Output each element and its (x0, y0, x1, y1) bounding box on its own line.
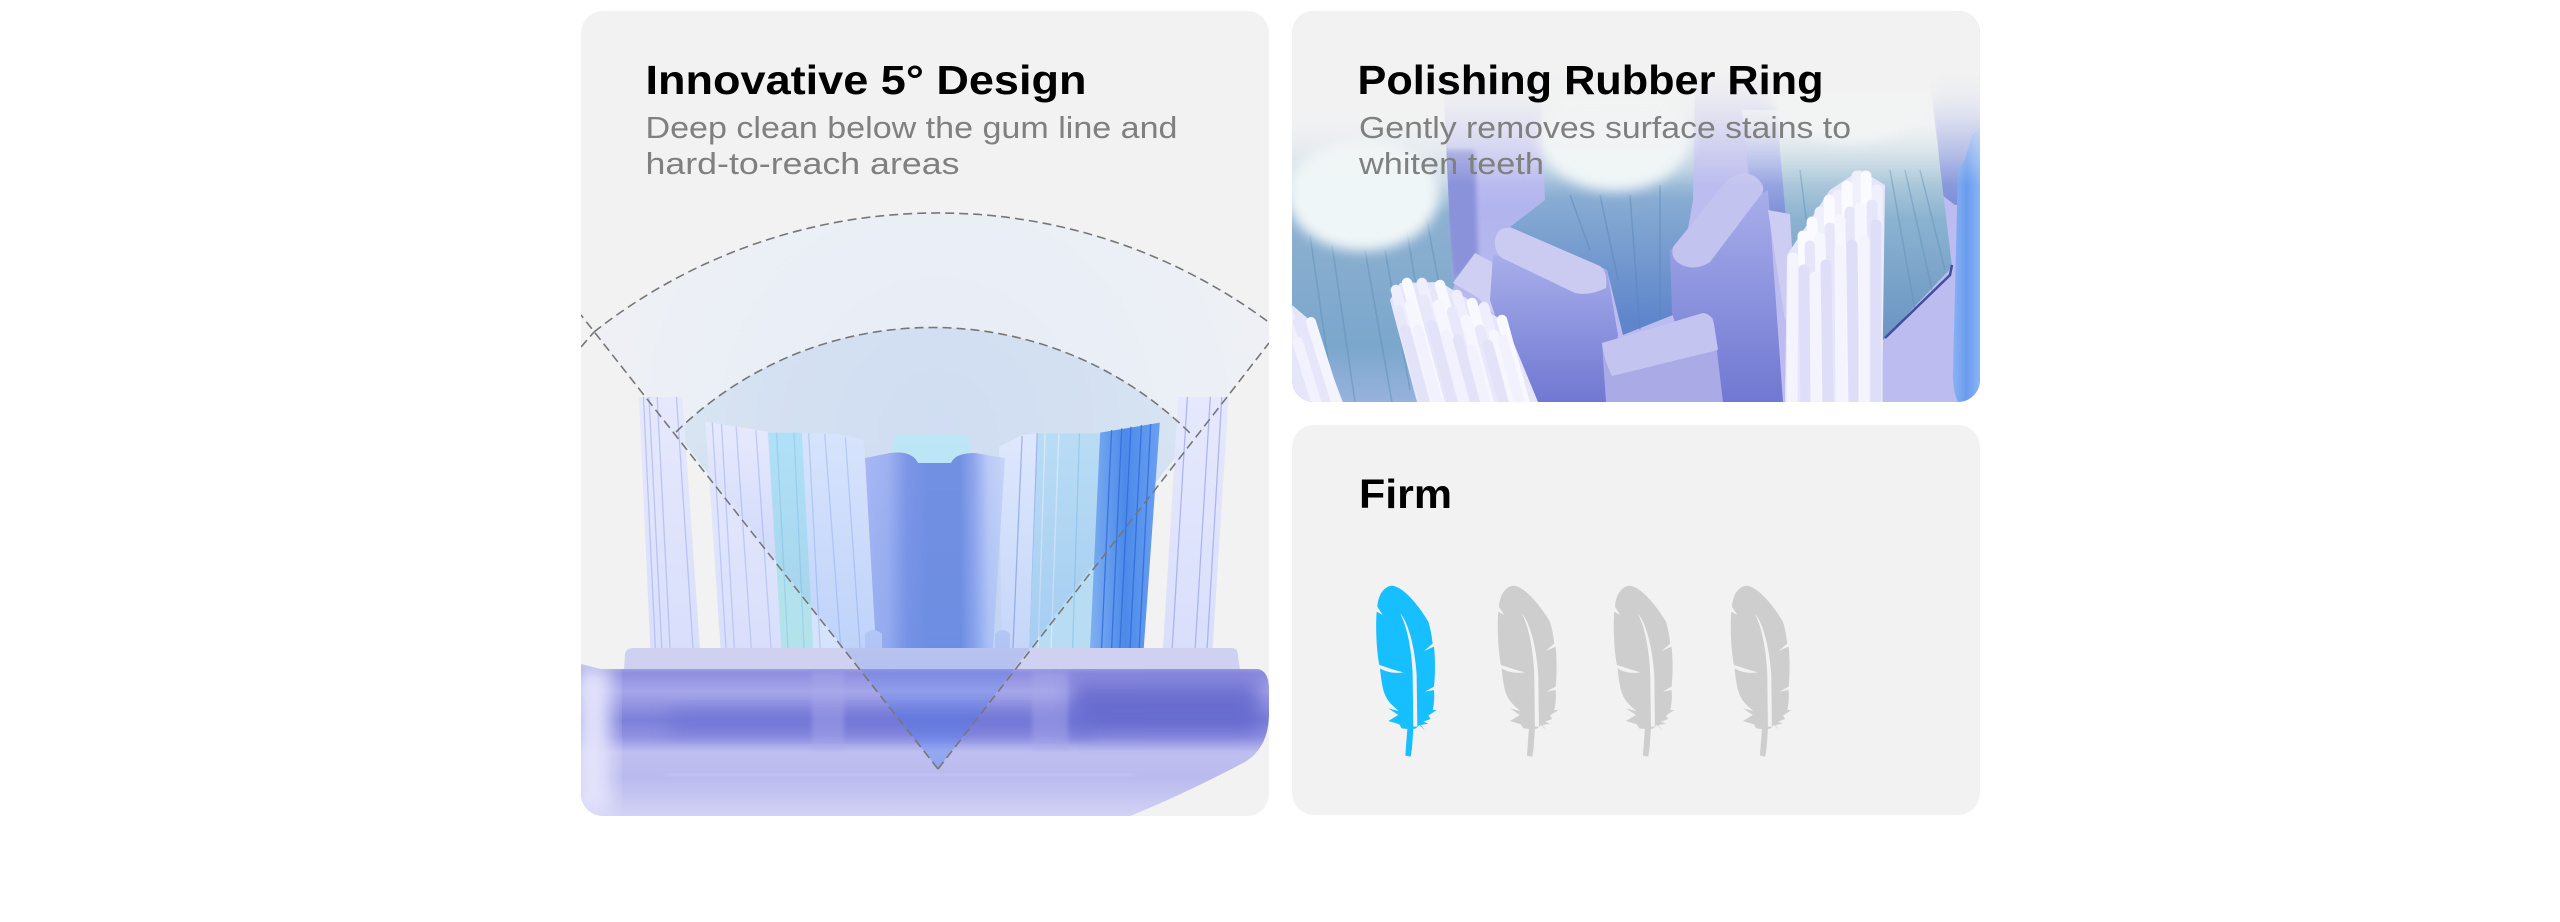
centre tuft tips (1537, 120, 1694, 199)
rod: right cap (1672, 173, 1763, 268)
icon: gray feather 3 (1731, 586, 1791, 757)
icon: blue feather (1376, 586, 1437, 757)
rod: front cap (1602, 313, 1718, 376)
floor wedge (1453, 253, 1494, 314)
left tuft tips (1287, 139, 1439, 251)
icon: gray feather 2 (1614, 586, 1674, 757)
lavender block behind (1479, 201, 1542, 236)
outer angle wedge (770, 243, 1108, 370)
centre blue tuft (1510, 80, 1695, 335)
heading: polishing rubber ring: Polishing Rubber Ring (1358, 57, 1824, 103)
rubber block (865, 452, 1005, 648)
description text: Deep clean below the gum line and (646, 110, 1178, 145)
base plate (624, 648, 1240, 670)
top fade overlay (1440, 11, 1980, 178)
white tuft: left (1390, 282, 1538, 408)
heading: firm: Firm (1359, 471, 1452, 517)
panel: innovative 5 degree design (575, 11, 1279, 816)
icon: gray feather 1 (1498, 586, 1558, 757)
tuft shadow edge (1885, 265, 1952, 338)
left blue tuft (1292, 100, 1455, 402)
purple tuft behind (1446, 148, 1480, 281)
white tuft: corner (1292, 305, 1343, 402)
rod: right body (1670, 190, 1783, 402)
heading: innovative 5 degree design: Innovative 5° Design (646, 57, 1086, 103)
rod: front (1602, 313, 1723, 402)
description text: hard-to-reach areas (646, 146, 960, 181)
description text (1358, 110, 1851, 181)
right tuft tips (1776, 102, 1862, 140)
description text: Gently removes surface stains to (1359, 110, 1851, 145)
inner angle wedge (684, 328, 1176, 648)
toothbrush head illustration (575, 213, 1279, 816)
bristle tufts (639, 397, 1229, 648)
description text (646, 110, 1178, 181)
bristle close-up illustration (1287, 11, 1980, 408)
light floor (1768, 210, 1792, 320)
description text: whiten teeth (1358, 146, 1544, 181)
rod: left cap (1495, 228, 1606, 294)
inner wedge blue overlay (737, 509, 1095, 768)
panel: firm bristle stiffness (1292, 425, 1980, 815)
blue side tuft (1953, 128, 1980, 402)
brush handle (575, 664, 1269, 816)
dashed angle lines (581, 213, 1279, 769)
panel: polishing rubber ring (1287, 11, 1980, 408)
rubber nubs (865, 630, 1010, 648)
rod: left body (1490, 255, 1618, 402)
back purple tuft (1742, 110, 1786, 214)
far right purple tuft (1936, 124, 1980, 205)
white tuft: right (1785, 170, 1885, 408)
right blue tuft (1779, 104, 1952, 340)
